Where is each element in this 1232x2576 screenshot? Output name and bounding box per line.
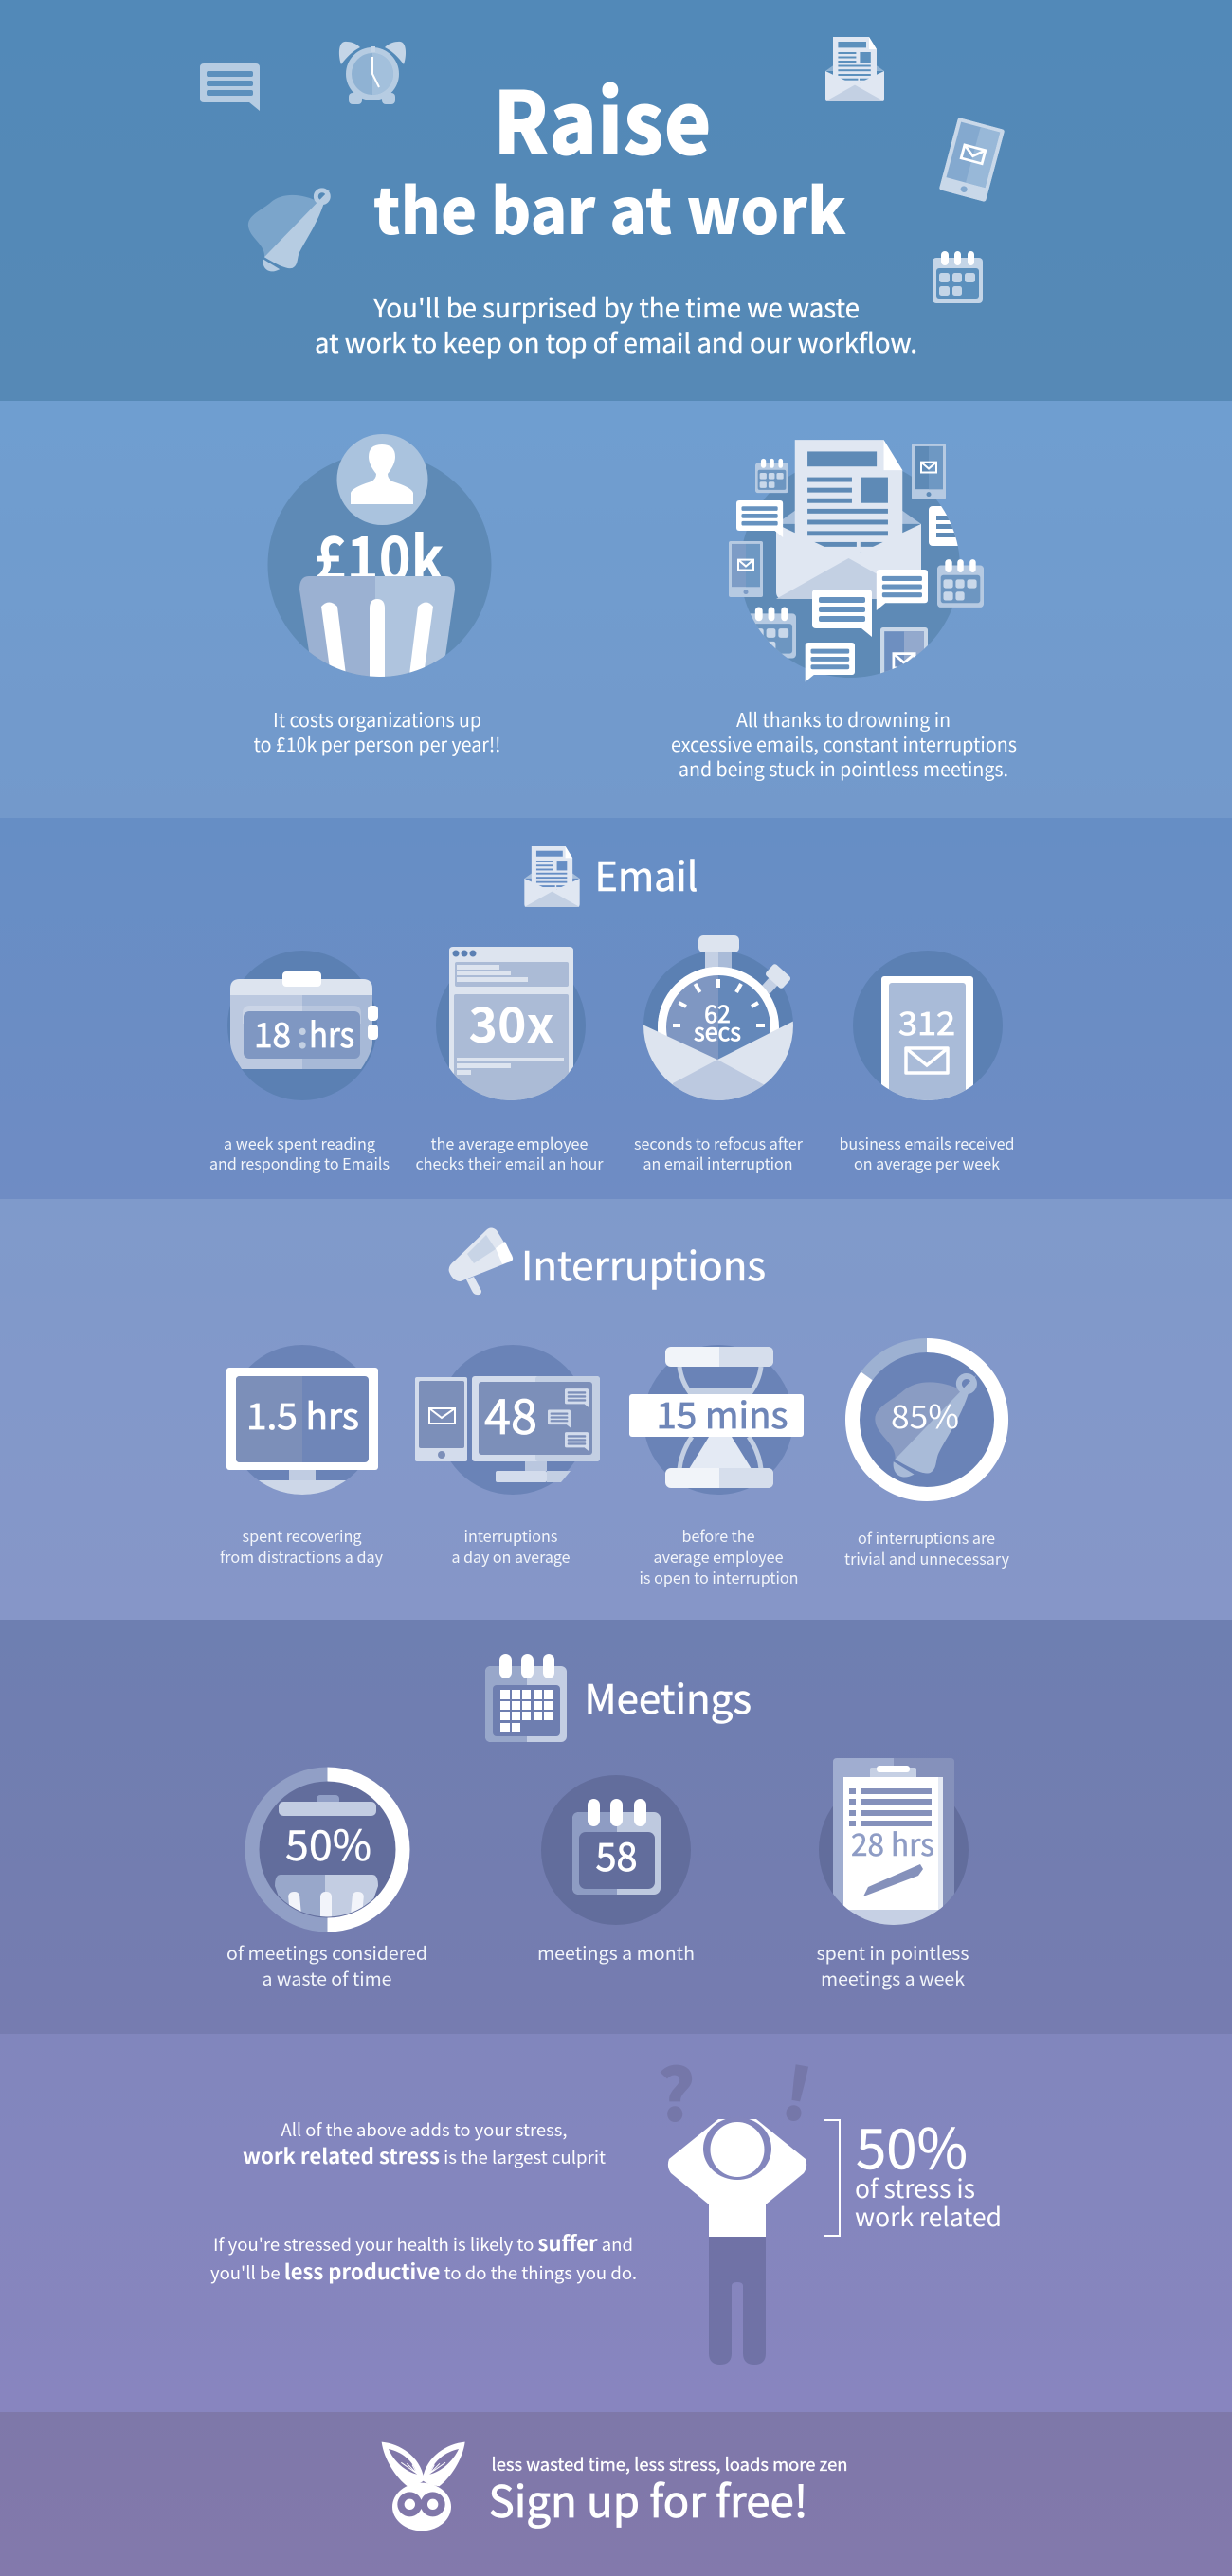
text block: email captions: an email interruption [643, 1152, 792, 1174]
callout: bracket [824, 2120, 840, 2236]
stat: 312 emails [853, 951, 1003, 1109]
text block: stress first paragraph: All of the above adds to your stress, [281, 2117, 567, 2142]
text block: stress second paragraph [210, 2227, 637, 2286]
text block: cost caption [254, 704, 500, 757]
panel: hero background [0, 0, 1232, 401]
text block: stress second paragraph: If you're stressed your health is likely to suffer and [213, 2227, 633, 2258]
icon: hero calendar [933, 251, 983, 303]
stat: 50 percent ring [252, 1774, 403, 1925]
stat: 18 hrs [227, 951, 378, 1100]
text block: interruptions captions: from distractions a day [220, 1545, 383, 1568]
icon: megaphone [449, 1228, 513, 1295]
stat: 62 secs [643, 935, 794, 1109]
text block: meetings captions: spent in pointless [817, 1938, 969, 1966]
title: the bar at work [373, 161, 846, 253]
panel: interruptions background [0, 1199, 1232, 1620]
stat: 15 mins [629, 1345, 804, 1495]
heading: email: Email [595, 845, 698, 903]
stat: 28 hrs clipboard [819, 1758, 969, 1933]
icon: stressed person: ? [657, 2038, 696, 2142]
icon: hero phone [939, 118, 1005, 202]
text block: meetings captions: of meetings considered [226, 1938, 427, 1966]
text block: email captions: business emails received [840, 1132, 1014, 1154]
text block: clutter caption: All thanks to drowning in [736, 704, 951, 733]
heading: interruptions: Interruptions [521, 1235, 766, 1293]
text block: interruptions captions: average employee [654, 1545, 783, 1568]
title [373, 54, 846, 253]
stat: 15 mins: 15 mins [656, 1387, 788, 1439]
text block: hero subtitle: at work to keep on top of email and our workflow. [315, 322, 917, 360]
icon: bunny logo [382, 2442, 465, 2531]
stat: 85 percent ring: 85% [891, 1391, 959, 1438]
text block: email captions: checks their email an hour [415, 1152, 604, 1174]
icon: person silhouette [351, 444, 413, 504]
stat: 62 secs: secs [694, 1014, 741, 1048]
text block: stress first paragraph: work related stress is the largest culprit [243, 2140, 606, 2170]
panel: cost background [0, 401, 1232, 818]
icon: bin [299, 576, 455, 682]
text block: email captions: a week spent reading [224, 1132, 376, 1154]
callout: fifty percent of stress: 50% [856, 2105, 968, 2185]
text block: email captions: the average employee [430, 1132, 588, 1154]
text block: email captions [209, 1132, 1014, 1174]
icon: hero speech bubble [200, 63, 260, 111]
stat: 312 emails: 312 [898, 998, 955, 1044]
stat: 1.5 hrs: 1.5 hrs [246, 1388, 359, 1440]
text block: clutter caption: excessive emails, constant interruptions [671, 729, 1017, 757]
heading: email [524, 845, 698, 907]
text block: clutter caption: and being stuck in pointless meetings. [679, 753, 1008, 782]
icon: hero bell [248, 190, 330, 271]
text block: stress first paragraph [243, 2117, 606, 2170]
text block: interruptions captions: a day on average [451, 1545, 571, 1568]
icon: hero alarm clock [339, 42, 406, 104]
panel: footer background [0, 2412, 1232, 2576]
text block: cost caption: to £10k per person per year!! [254, 729, 500, 757]
stat: 62 secs: 62 [704, 996, 731, 1030]
text block: meetings captions: a waste of time [262, 1964, 392, 1991]
panel: stress background [0, 2034, 1232, 2412]
heading: meetings: Meetings [584, 1668, 752, 1726]
text block: meetings captions: meetings a month [537, 1938, 695, 1966]
text block: cost caption: It costs organizations up [273, 704, 481, 733]
stat: 28 hrs clipboard: 28 hrs [851, 1822, 934, 1865]
stat: 18 hrs: hrs [309, 1008, 354, 1058]
icon: hero document in envelope [825, 37, 884, 101]
icon: stressed person [657, 2036, 821, 2365]
callout: fifty percent of stress: of stress is [855, 2168, 975, 2205]
text block: email captions: on average per week [854, 1152, 1000, 1174]
text block: stress second paragraph: you'll be less productive to do the things you do. [210, 2256, 637, 2286]
stat: 30x [436, 947, 586, 1109]
text block: clutter caption [671, 704, 1017, 782]
text block: meetings captions [226, 1938, 969, 1991]
text block: hero subtitle: You'll be surprised by the time we waste [372, 287, 860, 325]
panel: email background [0, 818, 1232, 1199]
text block: email captions: seconds to refocus after [634, 1132, 804, 1154]
chart: clutter cluster [729, 440, 984, 706]
text block: interruptions captions: of interruptions are [858, 1526, 995, 1549]
stat: ten thousand pounds: £10k [315, 510, 444, 599]
text block: interruptions captions [220, 1524, 1009, 1588]
callout: fifty percent of stress [855, 2105, 1002, 2234]
text block: interruptions captions: is open to interruption [639, 1566, 798, 1588]
chart: cost per person bin [267, 434, 491, 682]
text block: call to action: less wasted time, less stress, loads more zen [491, 2452, 847, 2476]
stat: 48 interruptions: 48 [484, 1378, 537, 1448]
text block: meetings captions: meetings a week [821, 1964, 965, 1991]
stat: 48 interruptions [415, 1345, 600, 1495]
title: Raise [493, 54, 712, 180]
stat: 18 hrs: 18 [254, 1008, 291, 1058]
callout: fifty percent of stress: work related [855, 2197, 1002, 2234]
text block: interruptions captions: trivial and unnecessary [844, 1547, 1009, 1569]
heading: interruptions [449, 1228, 766, 1295]
stat: 30x: 30x [468, 986, 553, 1057]
text block: hero subtitle [315, 287, 917, 360]
stat: 18 hrs: : [297, 1007, 308, 1059]
text block: interruptions captions: interruptions [464, 1524, 558, 1547]
stat: 58 meetings [541, 1775, 691, 1925]
text block: interruptions captions: before the [682, 1524, 754, 1547]
stat: 85 percent ring [853, 1346, 1002, 1495]
stat: 58 meetings: 58 [595, 1825, 637, 1882]
heading: meetings [485, 1654, 752, 1742]
text block: call to action: Sign up for free! [489, 2468, 807, 2531]
text block: email captions: and responding to Emails [209, 1152, 390, 1174]
panel: meetings background [0, 1620, 1232, 2034]
text block: interruptions captions: spent recovering [243, 1524, 362, 1547]
stat: 50 percent ring: 50% [285, 1812, 371, 1873]
stat: 1.5 hrs [226, 1345, 379, 1499]
icon: stressed person: ! [775, 2036, 821, 2143]
